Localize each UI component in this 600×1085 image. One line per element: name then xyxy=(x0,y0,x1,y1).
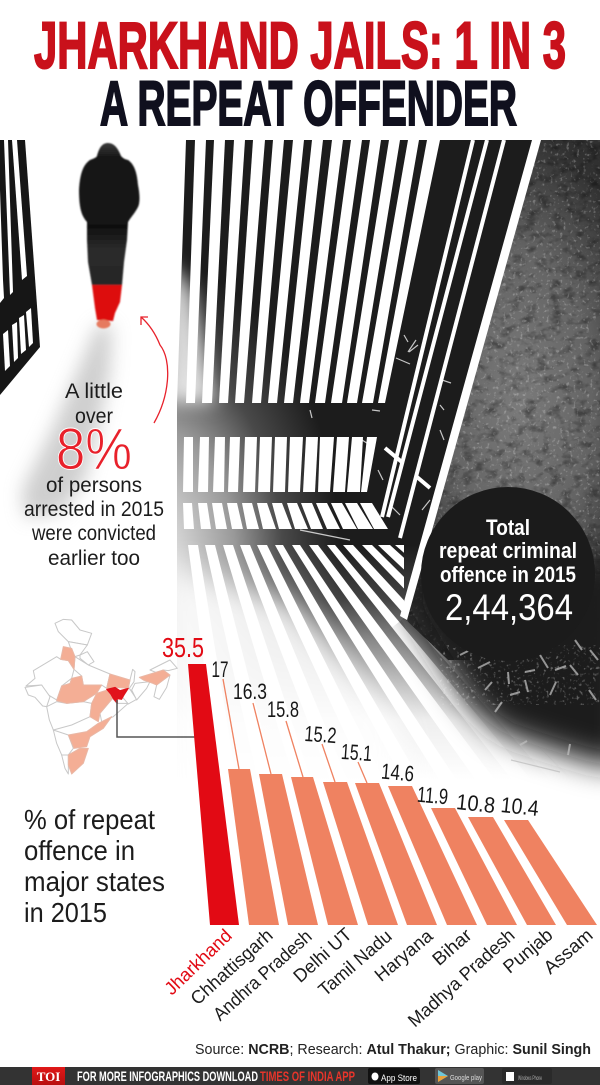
state labels: Jharkhand xyxy=(160,925,236,999)
callout: 8 percent arrested: of persons xyxy=(46,473,142,497)
bar value labels: 16.3 xyxy=(233,679,267,704)
heading: percent of repeat offence: offence in xyxy=(24,835,135,866)
state labels: Delhi UT xyxy=(289,923,356,986)
bar value labels: 11.9 xyxy=(416,782,449,809)
bar value labels: 15.2 xyxy=(304,721,337,748)
state labels: Tamil Nadu xyxy=(314,925,396,1000)
title xyxy=(34,8,566,139)
heading: percent of repeat offence: % of repeat xyxy=(24,804,155,835)
red arrow xyxy=(141,317,168,423)
state labels: Haryana xyxy=(370,925,437,985)
state labels: Assam xyxy=(539,924,597,978)
connector from map to Jharkhand bar xyxy=(117,700,195,737)
person walking xyxy=(79,143,140,328)
floor shadow of person xyxy=(22,325,112,518)
state labels xyxy=(160,923,597,1031)
heading: percent of repeat offence xyxy=(24,804,165,928)
windows phone badge: Windows Phone xyxy=(518,1076,542,1082)
footer bar: TIMES OF INDIA APP xyxy=(260,1068,355,1084)
bar chart: repeat offence by state xyxy=(160,632,597,1031)
callout: 8 percent arrested xyxy=(24,379,164,570)
app store badge: App Store xyxy=(381,1073,417,1084)
google play badge xyxy=(435,1068,484,1084)
callout: 8 percent arrested: 8% xyxy=(56,417,132,482)
callout: 8 percent arrested: over xyxy=(75,404,113,428)
state labels: Punjab xyxy=(499,924,557,977)
state labels: Andhra Pradesh xyxy=(209,925,316,1025)
bar value labels: 15.1 xyxy=(340,739,373,766)
callout circle: total repeat offences: repeat criminal xyxy=(439,538,577,563)
bar value labels: 35.5 xyxy=(162,632,204,663)
callout circle: total repeat offences: offence in 2015 xyxy=(440,562,576,587)
bar value labels: 10.8 xyxy=(455,789,496,818)
callout: 8 percent arrested: were convicted xyxy=(31,521,156,545)
TOI logo xyxy=(32,1067,65,1085)
background texture wall xyxy=(400,140,600,660)
footer bar xyxy=(0,1067,600,1085)
callout circle: total repeat offences: 2,44,364 xyxy=(445,587,573,628)
google play badge: Google play xyxy=(450,1073,482,1082)
left jail door xyxy=(0,140,40,395)
source credit: Source: NCRB; Research: Atul Thakur; Graphic: Sunil Singh xyxy=(195,1041,591,1058)
callout: 8 percent arrested: arrested in 2015 xyxy=(24,497,164,521)
state labels: Chhattisgarh xyxy=(186,924,277,1009)
bar value labels: 10.4 xyxy=(500,792,540,821)
door outer edge and thin bars xyxy=(300,140,541,620)
callout circle: total repeat offences: Total xyxy=(486,515,530,540)
windows phone badge xyxy=(502,1068,552,1084)
footer bar: FOR MORE INFOGRAPHICS DOWNLOAD xyxy=(77,1068,258,1084)
heading: percent of repeat offence: major states xyxy=(24,866,165,897)
callout: 8 percent arrested: A little xyxy=(65,379,123,403)
app store badge xyxy=(368,1068,420,1084)
state labels: Bihar xyxy=(428,924,476,970)
callout circle: total repeat offences xyxy=(421,487,595,661)
dark floor with debris xyxy=(404,560,600,772)
bar value labels: 17 xyxy=(212,657,228,682)
jail door: bars and light rays xyxy=(177,140,532,752)
map of India xyxy=(25,619,177,774)
TOI logo: TOI xyxy=(37,1069,60,1084)
bar value labels xyxy=(162,632,540,821)
bar value labels: 15.8 xyxy=(267,697,299,722)
heading: percent of repeat offence: in 2015 xyxy=(24,897,107,928)
state labels: Madhya Pradesh xyxy=(404,924,519,1031)
bar value labels: 14.6 xyxy=(380,759,415,786)
callout: 8 percent arrested: earlier too xyxy=(48,546,140,570)
